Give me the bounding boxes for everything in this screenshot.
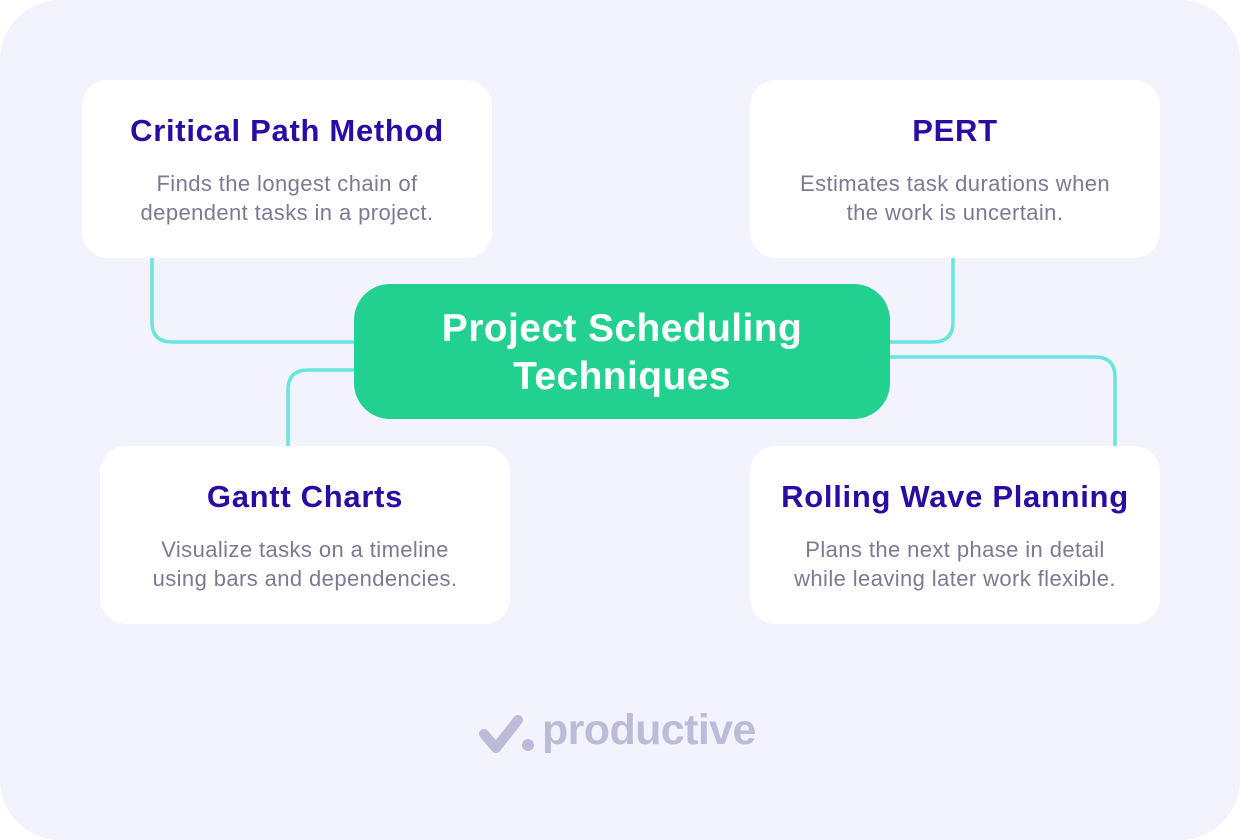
card: Critical Path Method: dependent tasks in a project. <box>141 200 433 225</box>
card: Gantt Charts: using bars and dependencies. <box>153 566 457 591</box>
card: PERT: the work is uncertain. <box>847 200 1063 225</box>
card: Rolling Wave Planning: while leaving later work flexible. <box>794 566 1116 591</box>
card: Rolling Wave Planning: Plans the next phase in detail <box>805 537 1105 562</box>
logo: productive: productive <box>542 706 756 754</box>
icon: check mark <box>479 715 534 753</box>
card: Gantt Charts <box>100 446 510 624</box>
card: Gantt Charts: Gantt Charts <box>207 479 403 514</box>
card: Critical Path Method: Critical Path Method <box>130 113 444 148</box>
card: PERT: PERT <box>912 113 998 148</box>
card: Critical Path Method: Finds the longest chain of <box>156 171 418 196</box>
card: Rolling Wave Planning <box>750 446 1160 624</box>
center title <box>354 284 890 419</box>
center title: Project Scheduling <box>442 307 802 350</box>
card: Critical Path Method <box>82 80 492 258</box>
card: PERT: Estimates task durations when <box>800 171 1110 196</box>
card: PERT <box>750 80 1160 258</box>
card: Rolling Wave Planning: Rolling Wave Planning <box>781 479 1129 514</box>
card: Gantt Charts: Visualize tasks on a timeline <box>161 537 449 562</box>
center title: Techniques <box>513 355 731 398</box>
